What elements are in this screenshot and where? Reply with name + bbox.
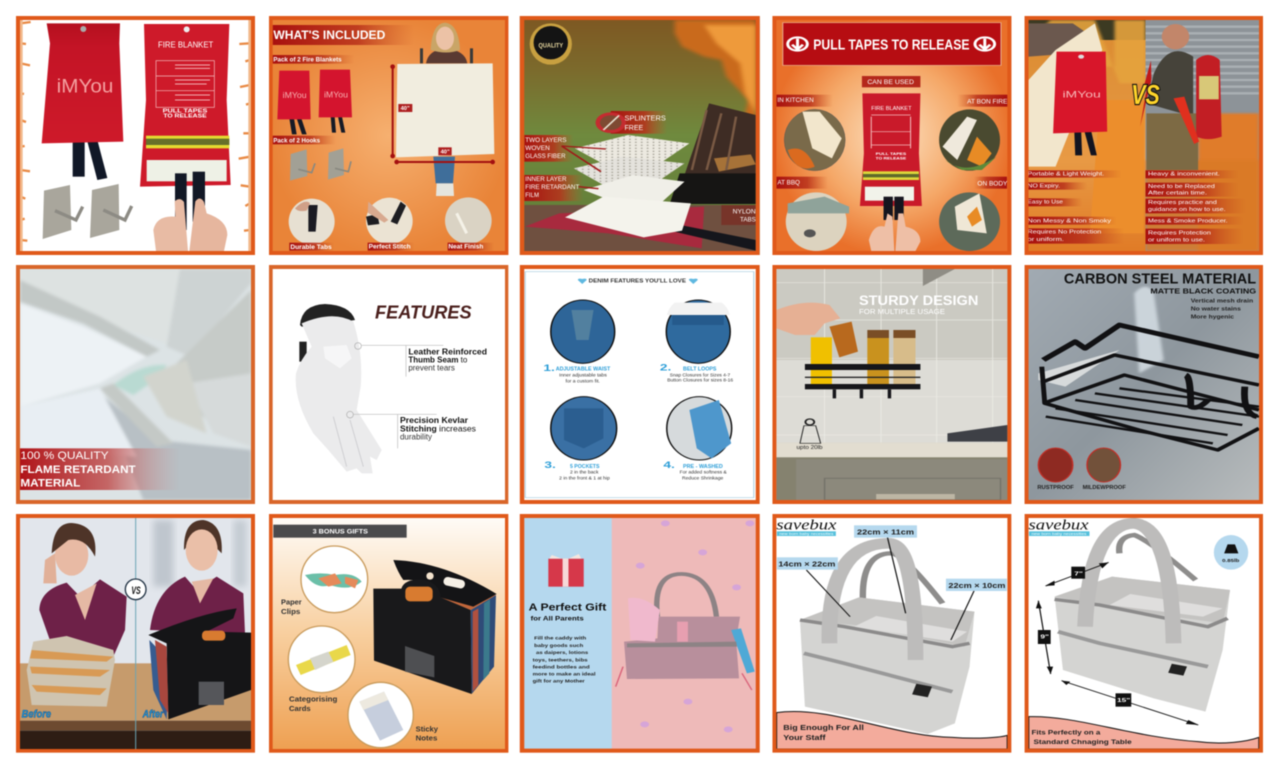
- dimension arrows: 9": [1040, 634, 1049, 640]
- right side scene: [1146, 20, 1259, 251]
- callout: thumb seam: Thumb Seam to: [408, 355, 468, 364]
- pack of hooks: Pack of 2 Hooks: [273, 137, 320, 144]
- caption: FLAME RETARDANT: [20, 464, 136, 476]
- blanket pouch with tabs: iMYou: [57, 77, 113, 98]
- heading: DENIM FEATURES YOU'LL LOVE: [589, 278, 686, 284]
- detail captions: Durable Tabs: [290, 245, 332, 251]
- panel: bonus gifts: [269, 514, 508, 753]
- detail captions: [289, 243, 494, 251]
- panel: before versus after: [16, 514, 255, 753]
- before and after labels: [22, 709, 164, 721]
- gift text: gift for any Mother: [533, 679, 585, 684]
- comparison rows: guidance on how to use.: [1148, 206, 1226, 213]
- panel: blanket versus extinguisher: [1025, 16, 1263, 255]
- heading: Vertical mesh drain: [1191, 298, 1253, 304]
- file organizer: [373, 560, 497, 694]
- callout: kevlar stitching: [347, 411, 476, 448]
- 40 inch dimensions: 40": [401, 106, 410, 112]
- feature 4: 4.: [663, 460, 675, 470]
- panel: what's included: [269, 16, 508, 255]
- feature 1: 1.: [543, 363, 555, 373]
- paper clips: [281, 546, 368, 616]
- use case labels: [776, 95, 1007, 189]
- weight icon: upto 20lb: [797, 445, 823, 451]
- header: 3 BONUS GIFTS: [313, 528, 368, 535]
- row 1, left tiles: [16, 16, 508, 255]
- row 2, right tiles: [520, 265, 1263, 504]
- before and after labels: After: [142, 709, 164, 721]
- opened fire blanket: PULL TAPES: [163, 109, 208, 115]
- feature 4: Reduce Shrinkage: [682, 476, 723, 481]
- comparison rows: After certain time.: [1148, 190, 1207, 196]
- gift text: more to make an ideal: [533, 672, 596, 677]
- caption: MATERIAL: [20, 478, 80, 490]
- can be used: [862, 76, 920, 87]
- caption: [783, 724, 864, 742]
- blanket pouch: [1053, 52, 1107, 155]
- caption: Big Enough For All: [783, 724, 864, 732]
- gift text: feedind bottles and: [533, 665, 590, 670]
- grill: [670, 103, 756, 204]
- woven fabric folds: [20, 269, 251, 500]
- felt caddy: [800, 543, 974, 734]
- jars on shelf: [805, 330, 920, 398]
- logo: new born baby necessities: [779, 532, 833, 536]
- stressed woman: [39, 523, 127, 657]
- heading bar: WHAT'S INCLUDED: [273, 28, 386, 42]
- row 2, left tiles: [16, 265, 508, 504]
- compartment labels: 22cm × 10cm: [948, 582, 1005, 590]
- happy woman: [150, 520, 245, 633]
- sticky notes: Sticky: [416, 726, 438, 733]
- banner: PULL TAPES TO RELEASE: [813, 37, 970, 53]
- comparison rows: Non Messy & Non Smoky: [1028, 218, 1112, 224]
- feature 2: 2.: [660, 363, 671, 373]
- dimension arrows: [1036, 562, 1199, 725]
- comparison rows: Heavy & inconvenient.: [1148, 171, 1220, 177]
- use case labels: ON BODY: [977, 180, 1007, 187]
- splinters free: SPLINTERS: [625, 114, 666, 122]
- feature 2: Button Closures for sizes 8-16: [667, 378, 733, 383]
- callout: kevlar stitching: Precision Kevlar: [400, 416, 468, 425]
- caption: Standard Chnaging Table: [1033, 738, 1132, 746]
- panel: caddy compartments: [772, 514, 1011, 753]
- panel: carbon steel material: [1025, 265, 1263, 504]
- use case labels: IN KITCHEN: [777, 96, 814, 104]
- feature 3: 3.: [544, 460, 556, 470]
- feature 2: Snap Closures for Sizes 4-7: [670, 373, 730, 378]
- felt caddy: [1055, 523, 1230, 712]
- panel: grill and layers: [520, 16, 760, 255]
- feature 2: BELT LOOPS: [683, 366, 716, 372]
- feature 3: 2 in the back: [570, 470, 599, 475]
- weight icon: [797, 419, 823, 451]
- blanket pouch with tabs: [42, 23, 123, 180]
- feature 1: for a custom fit.: [566, 379, 600, 384]
- caption: Your Staff: [783, 734, 826, 742]
- swoosh: [776, 711, 1007, 749]
- heading: [859, 292, 978, 316]
- 40 inch dimensions: [390, 64, 495, 164]
- layer labels: FIRE RETARDANT: [525, 183, 580, 191]
- feature 3: [544, 397, 617, 481]
- categorising cards: Cards: [289, 704, 311, 713]
- comparison rows: NO Expiry.: [1028, 183, 1060, 189]
- use case labels: AT BBQ: [777, 179, 800, 186]
- dimension arrows: 15": [1117, 697, 1130, 704]
- layer labels: GLASS FIBER: [525, 152, 566, 160]
- flames: [675, 20, 756, 147]
- extinguisher: [1196, 55, 1222, 139]
- wooden table and mat: [524, 205, 756, 251]
- callout: thumb seam: prevent tears: [408, 364, 455, 373]
- heading: More hygenic: [1191, 314, 1234, 320]
- blanket with hands: TO RELEASE: [876, 156, 907, 161]
- callout: thumb seam: Leather Reinforced: [408, 347, 487, 356]
- feature 4: [663, 397, 732, 481]
- blanket with hands: [860, 93, 922, 251]
- comparison rows: or uniform to use.: [1148, 237, 1205, 243]
- panel: sturdy design: [772, 265, 1011, 504]
- glove: [296, 304, 382, 473]
- logo: savebux: [1029, 517, 1088, 533]
- paper clips: Clips: [281, 609, 300, 616]
- categorising cards: [288, 626, 355, 713]
- divider and VS badge: [125, 518, 146, 749]
- pack of blankets: iMYou: [283, 90, 307, 100]
- confetti sprites: [636, 520, 754, 732]
- row 3, left tiles: [16, 514, 508, 753]
- row 1, right tiles: [520, 16, 1263, 255]
- gift text: A Perfect Gift: [529, 602, 607, 613]
- feature 3: 5 POCKETS: [570, 464, 599, 470]
- layer labels: FILM: [525, 191, 539, 199]
- blanket with hands: FIRE BLANKET: [871, 105, 912, 112]
- can be used: CAN BE USED: [867, 78, 914, 86]
- heading: [1064, 270, 1256, 320]
- man: [1146, 51, 1193, 117]
- dimension arrows: 7": [1074, 571, 1083, 577]
- header: [273, 525, 407, 538]
- splinters free: FREE: [625, 124, 643, 132]
- quality badge: QUALITY: [539, 41, 563, 49]
- comparison rows: Easy to Use: [1028, 199, 1063, 205]
- caddy with goods: [616, 574, 755, 690]
- opened fire blanket: TO RELEASE: [163, 113, 207, 119]
- feature 3: 2 in the front & 1 at hip: [559, 476, 610, 481]
- panel: fire blanket product: [16, 16, 255, 255]
- caption: 100 % QUALITY: [20, 450, 109, 462]
- layer labels: TABS: [740, 216, 756, 223]
- detail circles: [289, 197, 492, 245]
- layer labels: [524, 135, 756, 225]
- compartment labels: [777, 525, 1007, 640]
- comparison rows: Portable & Light Weight.: [1028, 171, 1104, 177]
- counter and cabinet: [776, 425, 1007, 500]
- rustproof and mildewproof badges: MILDEWPROOF: [1083, 485, 1126, 491]
- gift text: baby goods such: [534, 644, 584, 649]
- row 3, right tiles: [520, 514, 1263, 753]
- opened fire blanket: FIRE BLANKET: [158, 39, 213, 49]
- categorising cards: Categorising: [289, 694, 337, 703]
- logo: new born baby necessities: [1031, 532, 1087, 536]
- layered sheets: [565, 135, 691, 237]
- feature 2: [660, 300, 733, 383]
- panel: denim features: [520, 265, 760, 504]
- use case labels: AT BON FIRE: [967, 98, 1007, 105]
- logo: savebux: [776, 517, 836, 533]
- gift text: as daipers, lotions: [536, 651, 589, 656]
- compartment labels: 22cm × 11cm: [857, 528, 914, 536]
- layer labels: INNER LAYER: [525, 175, 567, 183]
- rustproof and mildewproof badges: RUSTPROOF: [1037, 485, 1074, 491]
- paper clips: Paper: [281, 599, 302, 606]
- wire rack: [1038, 325, 1259, 450]
- feature 4: For added softness &: [680, 470, 727, 475]
- opened fire blanket: [140, 24, 231, 251]
- divider and VS badge: VS: [131, 585, 141, 597]
- blanket pouch: iMYou: [1062, 89, 1101, 100]
- layer labels: WOVEN: [525, 144, 550, 152]
- panel: caddy dimensions: [1025, 514, 1263, 753]
- hand with jar: [776, 303, 858, 357]
- caption: [20, 448, 180, 490]
- layer labels: NYLON: [733, 208, 756, 215]
- comparison rows: Requires Protection: [1148, 230, 1211, 236]
- 40 inch dimensions: 40": [441, 149, 450, 155]
- sticky notes: Notes: [416, 736, 437, 743]
- comparison rows: Mess & Smoke Producer.: [1148, 218, 1228, 224]
- feature 4: PRE - WASHED: [683, 464, 723, 470]
- heading: MATTE BLACK COATING: [1150, 287, 1256, 295]
- before and after labels: Before: [22, 709, 51, 721]
- pack of hooks: [273, 136, 351, 181]
- blanket with hands: PULL TAPES: [876, 152, 907, 157]
- pack of blankets: iMYou: [324, 89, 348, 99]
- adhesive hooks: [43, 184, 132, 239]
- file organizer: [148, 608, 251, 719]
- comparison rows: Need to be Replaced: [1148, 183, 1215, 190]
- left side scene: [1029, 20, 1146, 233]
- feature 1: Inner adjustable tabs: [559, 373, 607, 378]
- detail captions: Perfect Stitch: [369, 244, 411, 250]
- callout: thumb seam: [355, 343, 487, 377]
- swoosh: [1029, 717, 1259, 749]
- quality badge: [530, 23, 572, 65]
- splinters free: [596, 111, 667, 134]
- pack of blankets: [273, 55, 354, 134]
- feature 1: ADJUSTABLE WAIST: [556, 367, 610, 372]
- table: [20, 663, 251, 749]
- caption: Fits Perfectly on a: [1031, 728, 1101, 736]
- pack of blankets: Pack of 2 Fire Blankets: [273, 57, 342, 64]
- heading bar: [273, 25, 414, 45]
- comparison rows: Requires No Protection: [1028, 229, 1101, 235]
- gift text: [529, 602, 607, 684]
- VS badge: VS: [1131, 79, 1160, 110]
- water stream: [1134, 287, 1164, 373]
- heading: FOR MULTIPLE USAGE: [859, 308, 945, 316]
- weight badge: [1214, 535, 1248, 570]
- feature 1: [543, 300, 615, 384]
- sticky notes: [348, 682, 438, 748]
- banner: [783, 23, 1001, 65]
- heading: FEATURES: [375, 301, 472, 322]
- panel: glove features: [269, 265, 508, 504]
- rustproof and mildewproof badges: [1037, 448, 1126, 491]
- gift text: toys, teethers, bibs: [533, 658, 588, 663]
- panel: a perfect gift: [520, 514, 760, 753]
- paper stack: [27, 636, 115, 707]
- gift text: for All Parents: [531, 615, 584, 622]
- detail captions: Neat Finish: [448, 244, 484, 250]
- caption: [1031, 728, 1132, 746]
- heading: No water stains: [1191, 306, 1241, 312]
- callout: kevlar stitching: Stitching increases: [400, 424, 476, 433]
- panel: pull tapes to release: [772, 16, 1011, 255]
- gift icon: [548, 554, 584, 587]
- weight badge: 0.85lb: [1222, 559, 1240, 564]
- woman holding blanket: [396, 23, 494, 196]
- comparison rows: Requires practice and: [1148, 199, 1217, 206]
- gift text: Fill the caddy with: [534, 636, 587, 641]
- layer labels: TWO LAYERS: [525, 136, 567, 144]
- compartment labels: 14cm × 22cm: [778, 560, 835, 568]
- comparison rows: [1028, 170, 1246, 244]
- comparison rows: or uniform.: [1028, 236, 1064, 243]
- use case photos: [784, 109, 1000, 251]
- callout: kevlar stitching: durability: [400, 433, 432, 442]
- heading: STURDY DESIGN: [859, 292, 978, 308]
- VS badge: [1131, 61, 1160, 127]
- panel: flame retardant material: [16, 265, 255, 504]
